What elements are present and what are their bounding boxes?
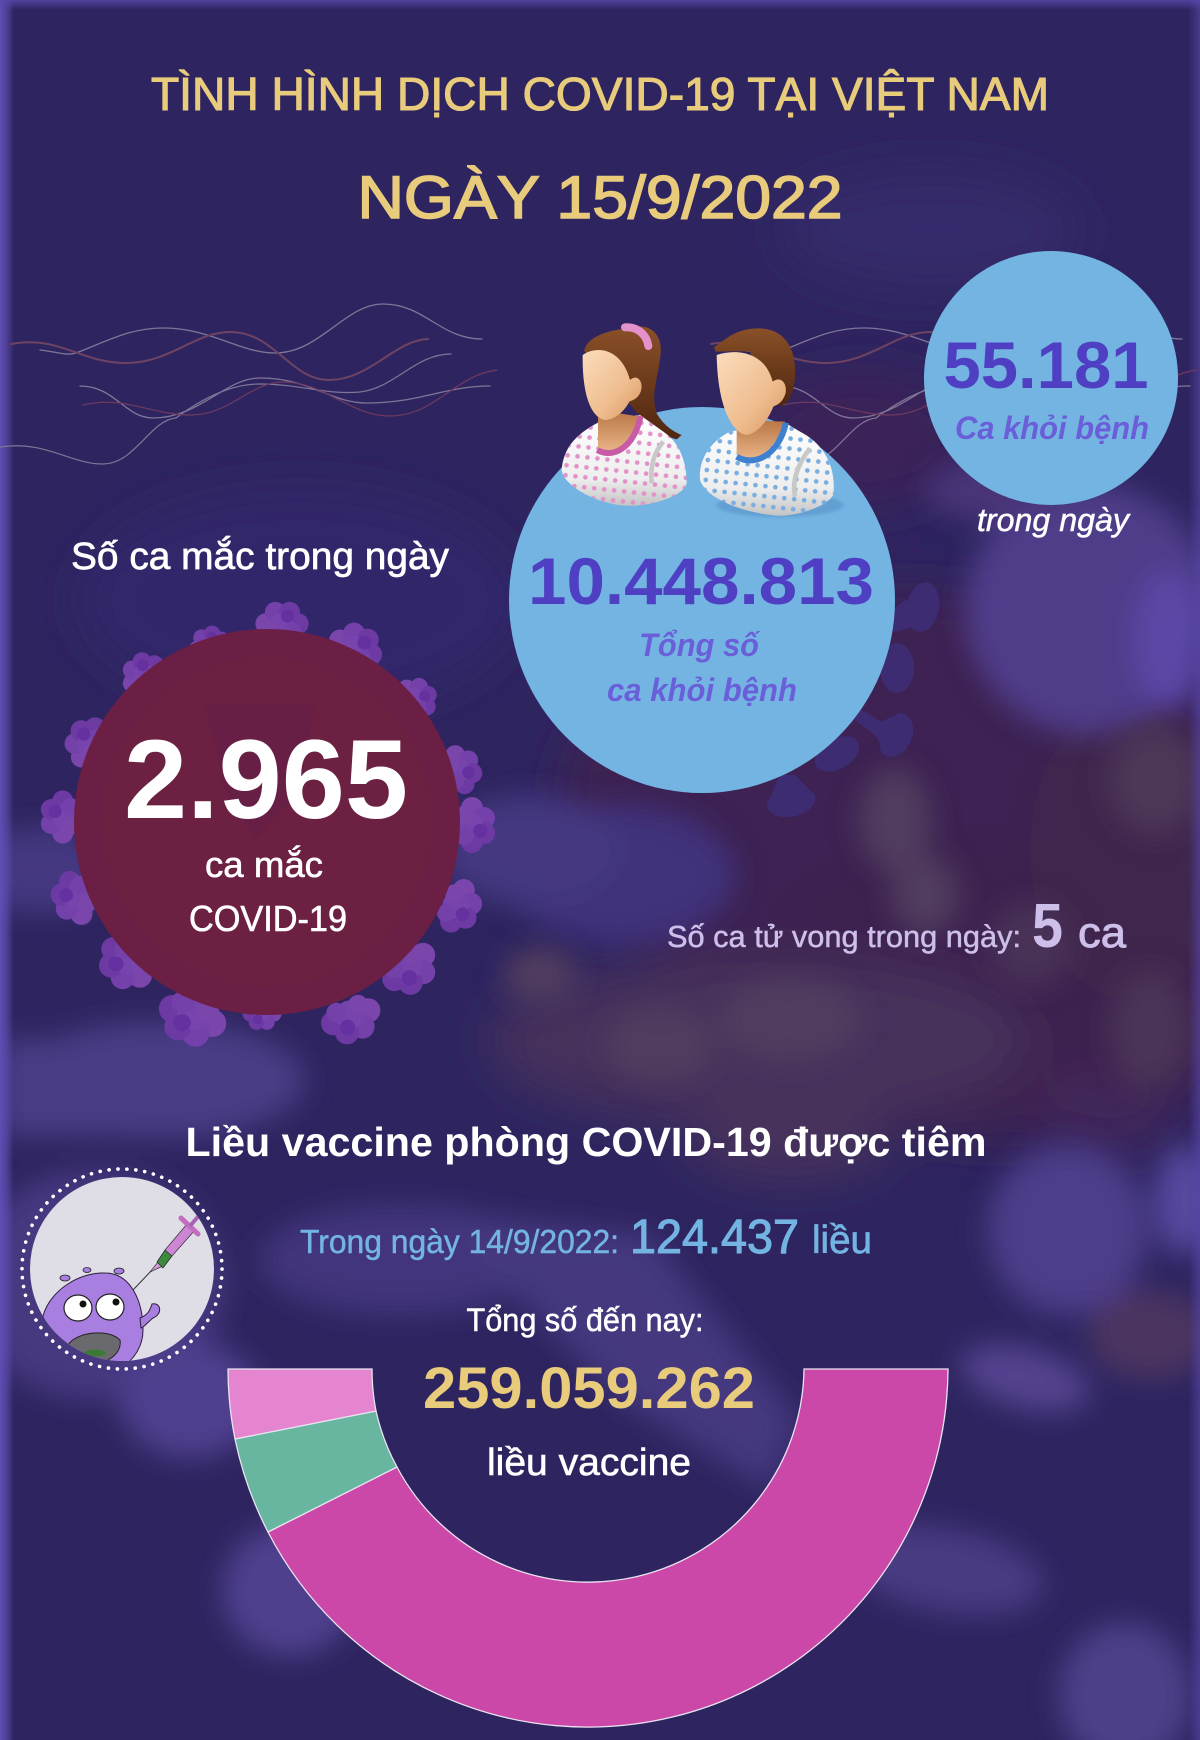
half donut chart — [228, 1369, 948, 1727]
daily cases number: 2.965 — [124, 717, 408, 842]
total recovered caption line two: ca khỏi bệnh — [607, 672, 797, 708]
total doses caption: liều vaccine — [487, 1442, 691, 1484]
date heading: NGÀY 15/9/2022 — [358, 164, 842, 231]
segment: green — [235, 1411, 397, 1532]
daily cases caption line two: COVID-19 — [189, 898, 347, 939]
daily deaths text: Số ca tử vong trong ngày: — [667, 919, 1021, 954]
icon: virus and syringe — [22, 1169, 222, 1369]
daily recovered caption: Ca khỏi bệnh — [955, 410, 1149, 446]
red circle — [74, 629, 460, 1015]
daily deaths text: ca — [1078, 909, 1126, 957]
daily vaccine doses: 124.437 — [630, 1211, 799, 1264]
icon: male patient — [700, 328, 843, 517]
total doses label: Tổng số đến nay: — [466, 1302, 704, 1338]
total recovered number: 10.448.813 — [528, 544, 874, 618]
daily vaccine doses: liều — [812, 1219, 872, 1262]
total doses number: 259.059.262 — [423, 1356, 755, 1421]
daily deaths text: 5 — [1032, 892, 1063, 961]
title: TÌNH HÌNH DỊCH COVID-19 TẠI VIỆT NAM — [151, 68, 1049, 120]
daily deaths text — [667, 892, 1126, 961]
total recovered caption line one: Tổng số — [639, 627, 761, 663]
vaccine section heading: Liều vaccine phòng COVID-19 được tiêm — [186, 1119, 986, 1165]
decorative DNA wave lines right — [700, 304, 1197, 464]
segment: magenta main — [268, 1369, 948, 1727]
decorative DNA wave lines left — [0, 304, 497, 464]
segment: light pink — [228, 1369, 376, 1439]
daily cases caption line one: ca mắc — [205, 844, 323, 885]
daily recovered sub caption: trong ngày — [977, 502, 1131, 538]
panel: daily recovered circle — [924, 251, 1178, 505]
virus spikes — [41, 602, 495, 1055]
panel: daily cases virus — [41, 602, 495, 1055]
panel: total recovered circle — [509, 407, 895, 793]
icon: female patient — [562, 326, 687, 506]
daily vaccine doses — [300, 1211, 872, 1264]
daily recovered number: 55.181 — [944, 328, 1148, 402]
daily vaccine doses: Trong ngày 14/9/2022: — [300, 1223, 619, 1260]
label: daily cases heading: Số ca mắc trong ngày — [71, 535, 449, 578]
faint virus spikes behind recovered circle — [767, 580, 943, 817]
